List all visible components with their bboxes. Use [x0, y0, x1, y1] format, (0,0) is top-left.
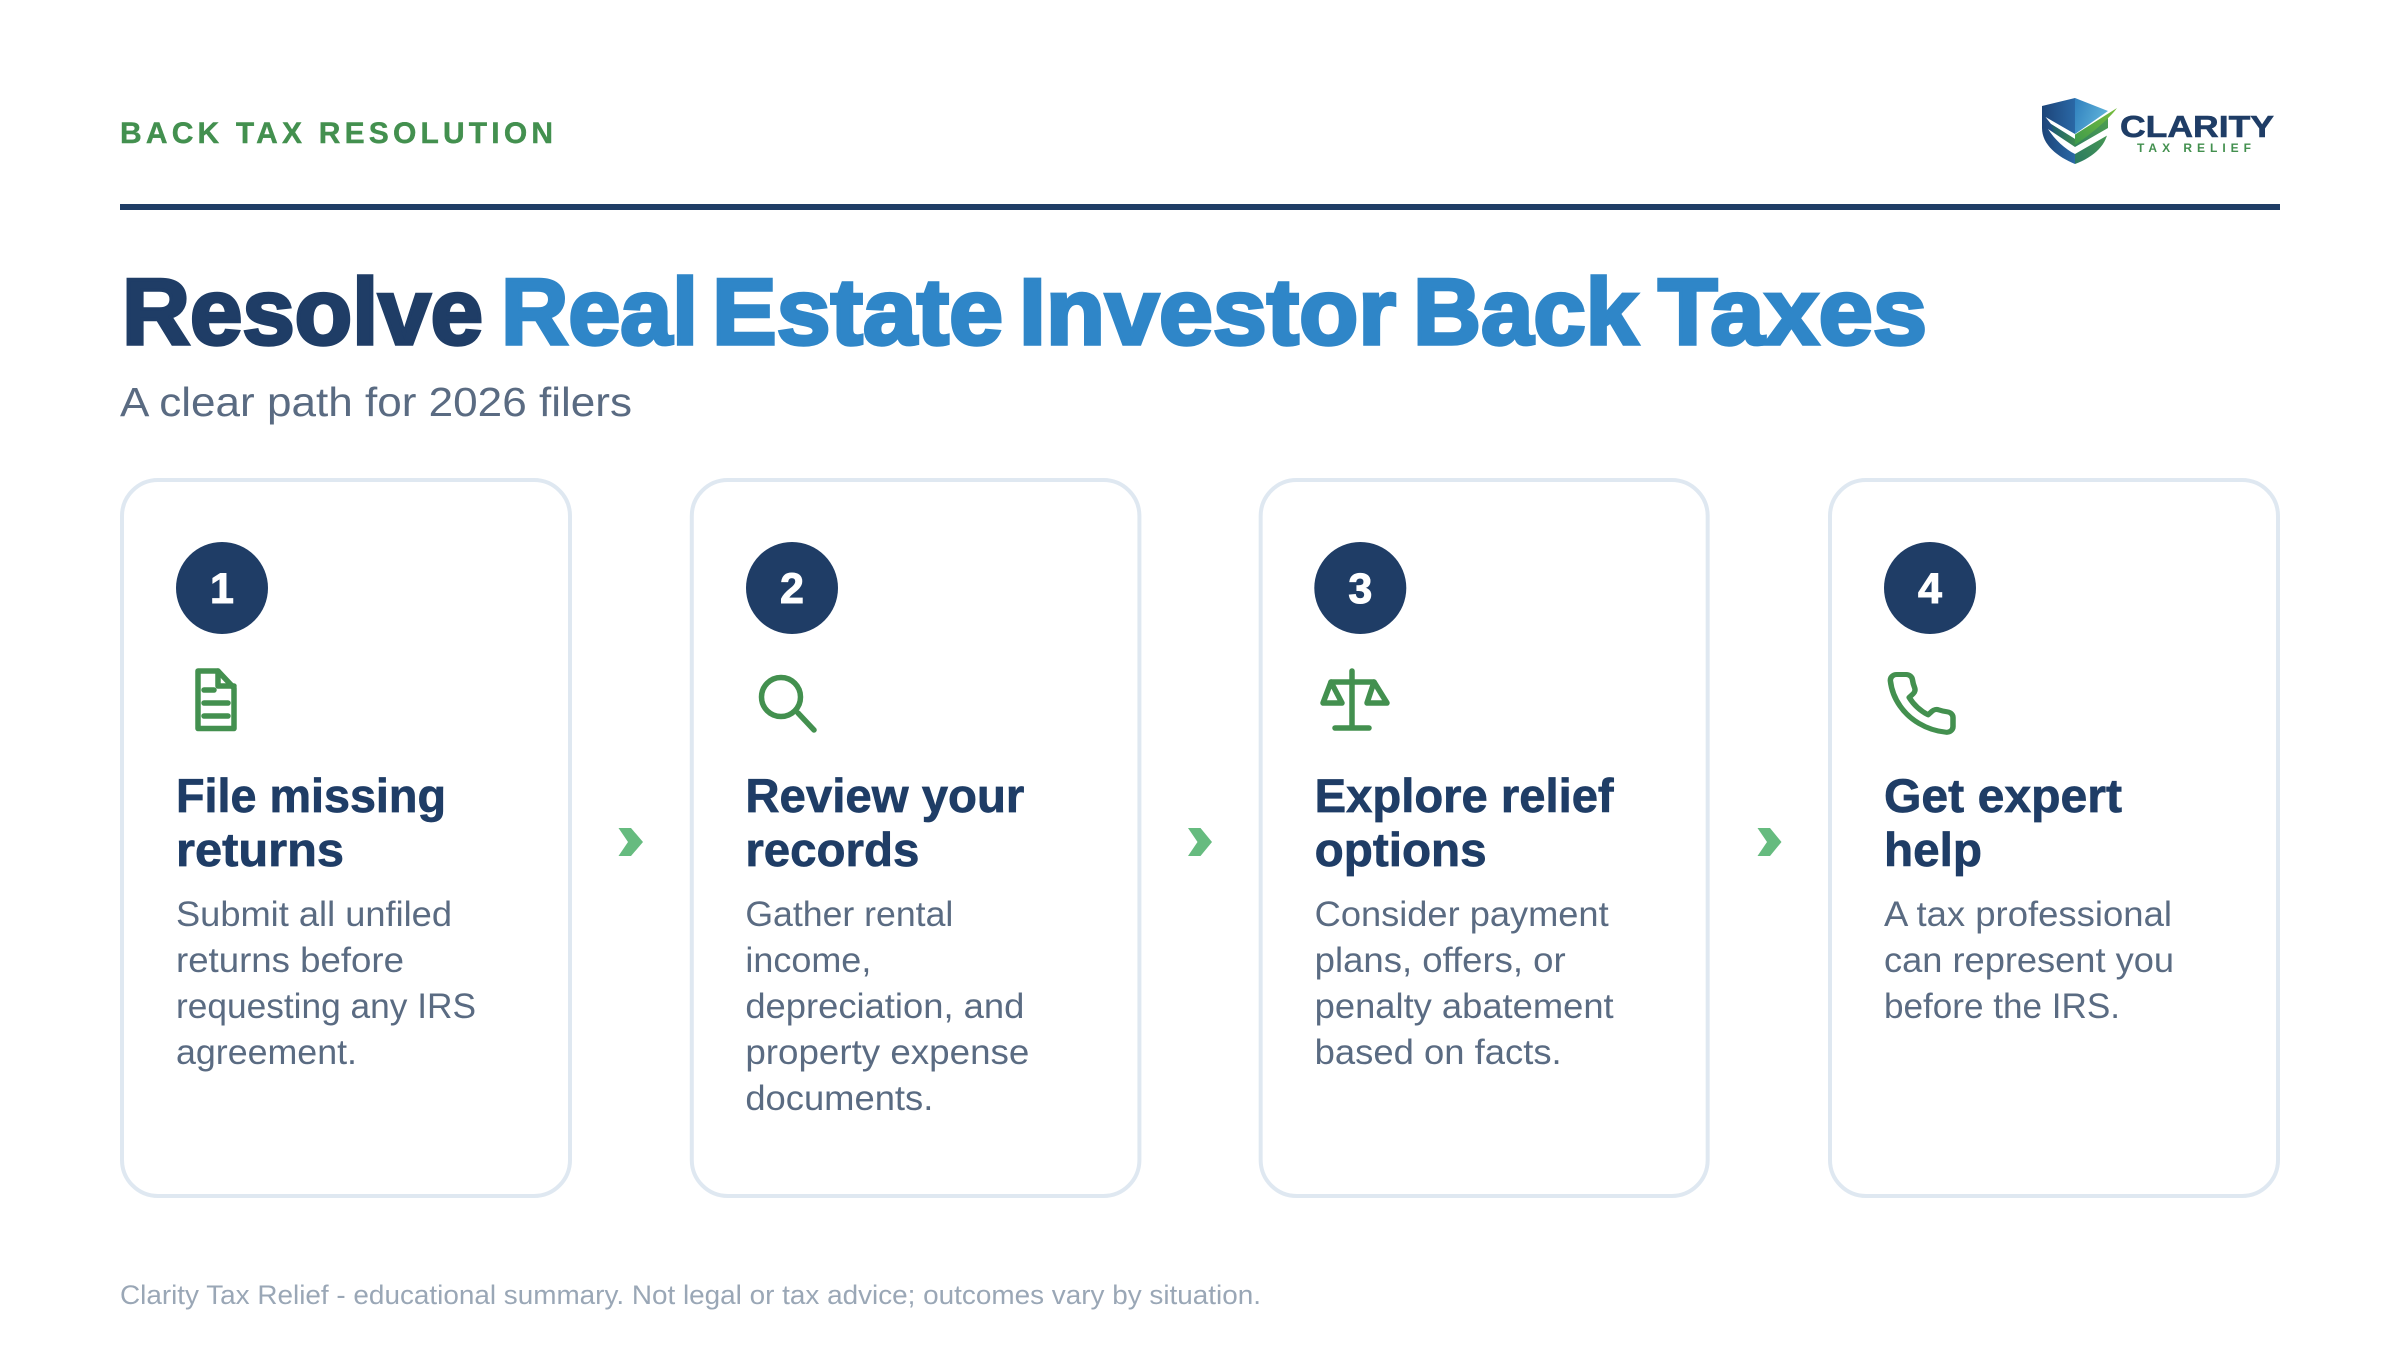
title: Estate	[712, 259, 1003, 364]
step 1 badge: 1	[210, 565, 234, 613]
step 1 description: requesting any IRS	[176, 987, 476, 1026]
step 4 heading	[1884, 769, 2122, 876]
step 3 badge: 3	[1348, 565, 1372, 613]
step 1 heading: File missing	[176, 769, 446, 822]
step 2 description: Gather rental	[745, 895, 953, 934]
step 2 heading: Review your	[745, 769, 1024, 822]
step 3 badge	[1314, 542, 1406, 634]
step 2 description: property expense	[745, 1033, 1029, 1072]
step 4 badge	[1884, 542, 1976, 634]
step 3 description: based on facts.	[1315, 1033, 1562, 1072]
step 1 description: Submit all unfiled	[176, 895, 452, 934]
icon: magnifier	[762, 678, 814, 730]
title: Back	[1413, 259, 1639, 364]
eyebrow label: BACK TAX RESOLUTION	[120, 117, 553, 150]
step 2 description: documents.	[745, 1079, 933, 1118]
title: Resolve	[122, 259, 483, 364]
step 4 heading: Get expert	[1884, 769, 2122, 822]
step 3 description: plans, offers, or	[1315, 941, 1566, 980]
step 1 description: agreement.	[176, 1033, 357, 1072]
step 1 badge	[176, 542, 268, 634]
logo tagline: TAX RELIEF	[2137, 141, 2251, 155]
step 1 description	[176, 895, 476, 1072]
step 4 badge: 4	[1918, 565, 1942, 613]
step 4 description: before the IRS.	[1884, 987, 2120, 1026]
icon: scales	[1323, 671, 1387, 728]
step 2 badge: 2	[780, 565, 804, 613]
panel: step 4 get expert help	[1830, 480, 2278, 1196]
header rule	[120, 204, 2280, 210]
step 2 heading: records	[745, 823, 919, 876]
step 4 description: can represent you	[1884, 941, 2174, 980]
step 4 description: A tax professional	[1884, 895, 2172, 934]
panel: step 1 file missing returns	[122, 480, 570, 1196]
arrow 2	[1188, 828, 1212, 856]
step 2 badge	[746, 542, 838, 634]
title: Taxes	[1658, 259, 1927, 364]
subtitle: A clear path for 2026 filers	[120, 379, 632, 425]
step 3 heading	[1315, 769, 1614, 876]
step 4 heading: help	[1884, 823, 1982, 876]
step 2 description: income,	[745, 941, 871, 980]
logo: Clarity Tax Relief	[2042, 98, 2274, 164]
arrow 1	[618, 828, 643, 856]
step 2 description	[745, 895, 1029, 1118]
step 3 heading: Explore relief	[1315, 769, 1614, 822]
title	[122, 259, 1927, 364]
step 3 heading: options	[1315, 823, 1487, 876]
icon: document	[198, 671, 234, 728]
step 3 description	[1315, 895, 1614, 1072]
logo shield icon	[2042, 98, 2117, 164]
panel: step 2 review your records	[692, 480, 1139, 1196]
step 3 description: penalty abatement	[1315, 987, 1614, 1026]
step 3 description: Consider payment	[1315, 895, 1609, 934]
title: Investor	[1019, 259, 1396, 364]
step 2 heading	[745, 769, 1024, 876]
footer disclaimer: Clarity Tax Relief - educational summary. Not legal or tax advice; outcomes vary by situation.	[120, 1280, 1261, 1310]
logo wordmark: CLARITY	[2120, 109, 2274, 144]
step 1 heading: returns	[176, 823, 344, 876]
step 1 heading	[176, 769, 446, 876]
panel: step 3 explore relief options	[1261, 480, 1708, 1196]
icon: phone	[1890, 674, 1953, 732]
step 1 description: returns before	[176, 941, 404, 980]
step 4 description	[1884, 895, 2174, 1026]
arrow 3	[1758, 828, 1782, 856]
title: Real	[501, 259, 698, 364]
step 2 description: depreciation, and	[745, 987, 1024, 1026]
